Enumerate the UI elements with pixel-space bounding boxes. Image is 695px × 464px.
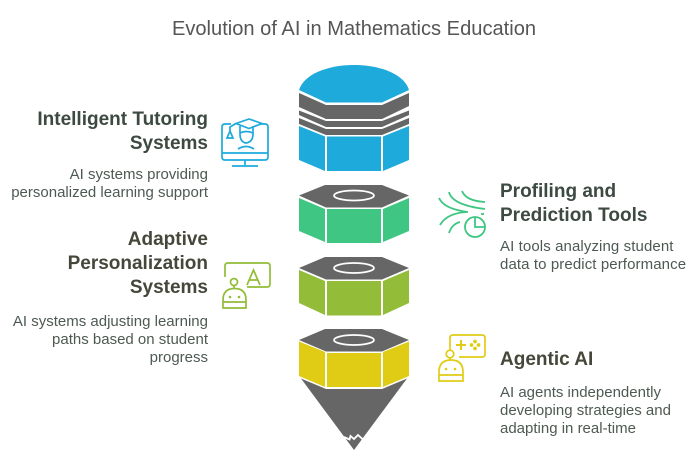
tier 2: green hexagon bbox=[299, 185, 409, 243]
heading: Intelligent Tutoring Systems: Intelligent Tutoring bbox=[37, 108, 208, 130]
text: Agentic AI description bbox=[500, 384, 671, 437]
heading: Profiling and Prediction Tools bbox=[500, 181, 647, 226]
heading: Profiling and Prediction Tools: Prediction Tools bbox=[500, 205, 647, 226]
heading: Agentic AI: Agentic AI bbox=[500, 349, 593, 370]
title: Evolution of AI in Mathematics Education bbox=[172, 18, 536, 40]
heading: Adaptive Personalization Systems: Systems bbox=[130, 277, 208, 298]
cone tip bbox=[301, 378, 407, 450]
text: Adaptive Personalization Systems description: AI systems adjusting learning bbox=[13, 313, 208, 330]
heading: Profiling and Prediction Tools: Profiling and bbox=[500, 181, 616, 202]
text: Profiling and Prediction Tools description: data to predict performance bbox=[500, 256, 686, 273]
heading: Intelligent Tutoring Systems bbox=[37, 108, 208, 154]
tier 4: yellow hexagon bbox=[299, 329, 409, 387]
text: Adaptive Personalization Systems description: progress bbox=[150, 349, 208, 366]
text: Profiling and Prediction Tools description: AI tools analyzing student bbox=[500, 238, 674, 255]
text: Intelligent Tutoring Systems description bbox=[11, 166, 208, 201]
text: Intelligent Tutoring Systems description: personalized learning support bbox=[11, 184, 208, 201]
icon: flow lines and pie chart bbox=[439, 191, 485, 237]
text: Intelligent Tutoring Systems description: AI systems providing bbox=[70, 166, 208, 183]
heading: Intelligent Tutoring Systems: Systems bbox=[130, 132, 208, 154]
text: Agentic AI description: AI agents independently bbox=[500, 384, 661, 401]
heading: Adaptive Personalization Systems: Adaptive bbox=[128, 229, 208, 250]
text: Profiling and Prediction Tools description bbox=[500, 238, 686, 273]
text: Agentic AI description: adapting in real-time bbox=[500, 420, 636, 437]
text: Agentic AI description: developing strategies and bbox=[500, 402, 671, 419]
icon: monitor with graduation cap bbox=[222, 119, 268, 166]
text: Adaptive Personalization Systems description: paths based on student bbox=[52, 331, 208, 348]
heading: Adaptive Personalization Systems: Personalization bbox=[68, 253, 208, 274]
icon: robot with letter A bbox=[223, 263, 270, 308]
text: Adaptive Personalization Systems description bbox=[13, 313, 208, 366]
heading: Adaptive Personalization Systems bbox=[68, 229, 208, 298]
icon: robot with game controller bbox=[439, 335, 485, 381]
tier 3: olive hexagon bbox=[299, 257, 409, 316]
tier 1: blue cylinder bbox=[299, 65, 409, 171]
